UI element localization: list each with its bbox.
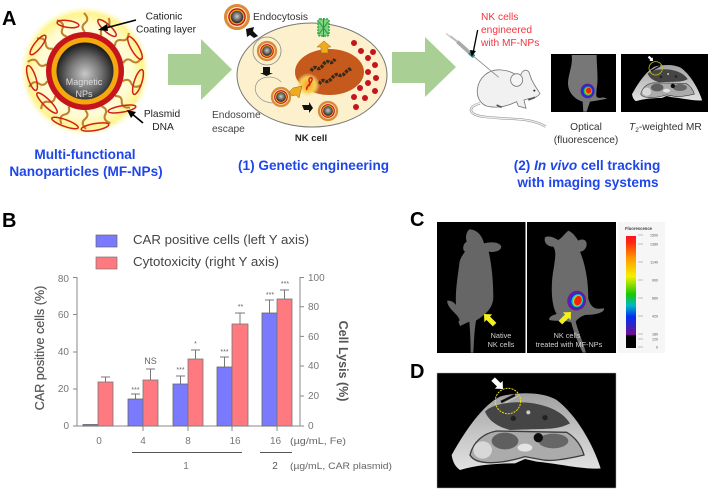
mouse ear <box>511 74 523 86</box>
heading: in vivo cell tracking: with imaging systems <box>516 175 659 190</box>
right axis tick labels: 60 <box>308 332 320 343</box>
treated mouse <box>545 231 604 353</box>
syringe <box>446 33 499 77</box>
label: T2-weighted MR: T <box>629 122 636 133</box>
yellow arrow: treated mouse <box>557 308 575 326</box>
gene delivery glow <box>296 73 320 97</box>
label: engineered NK cells: NK cells <box>481 12 518 23</box>
x axis labels: 16 <box>270 436 281 447</box>
significance marks: *** <box>220 349 229 356</box>
fluorescence colour scale: 420 <box>652 314 658 318</box>
plasmid DNA loops <box>24 17 146 133</box>
right axis tick labels: 0 <box>308 421 314 432</box>
orange pathway arrows <box>289 41 331 98</box>
x axis labels: 1 <box>183 461 189 472</box>
left axis tick labels: 20 <box>58 384 69 395</box>
yellow arrow: native mouse <box>480 310 498 328</box>
panel B: bar chart: (µg/mL, CAR plasmid) <box>290 461 392 472</box>
legend <box>96 233 309 269</box>
left axis tick labels: 40 <box>58 347 69 358</box>
label: optical: Optical <box>570 122 602 133</box>
error bars <box>101 290 289 399</box>
left axis title: CAR positive cells (%) <box>33 286 47 410</box>
right axis tick labels: 40 <box>308 361 320 372</box>
entering nanoparticle <box>224 4 250 30</box>
plasmid in nucleus <box>307 78 312 90</box>
DNA strands <box>311 59 350 84</box>
panel: D heading label: D <box>410 361 424 383</box>
fluorescence colour scale: 1500 <box>650 234 658 238</box>
ruptured endosome <box>255 77 281 103</box>
right axis tick labels: 80 <box>308 302 320 313</box>
thumbnail fluorescence signal <box>581 84 595 98</box>
significance marks: * <box>194 341 197 348</box>
cell body <box>237 23 387 127</box>
left axis tick labels: 0 <box>63 421 69 432</box>
thumbnail mouse <box>568 55 607 112</box>
panel: A heading label: A <box>2 8 16 30</box>
heading: multi-functional nanoparticles: Multi-functional <box>34 147 136 162</box>
cationic coating strands <box>27 13 142 129</box>
callout: cationic coating layer: Coating layer <box>136 24 197 36</box>
native label: Native <box>491 331 511 340</box>
fluorescence colour scale: 1380 <box>650 242 658 246</box>
significance marks: *** <box>266 292 274 299</box>
x axis unit labels: (µg/mL, Fe) <box>290 436 346 447</box>
panel C: fluorescence images <box>437 222 665 353</box>
treated mouse image <box>527 222 616 353</box>
x axis labels: 2 <box>272 461 278 472</box>
native label: NK cells <box>488 340 515 349</box>
significance marks: ** <box>238 304 243 311</box>
image: T2 MR thumbnail <box>621 54 708 112</box>
nanoparticle after endosome escape <box>271 87 291 107</box>
heading: in vivo cell tracking: (2) In vivo cell tracking <box>514 158 660 173</box>
heading: genetic engineering: (1) Genetic engineering <box>238 158 389 173</box>
mouse face <box>533 90 535 92</box>
label: engineered NK cells: engineered <box>481 25 532 36</box>
blue bars <box>83 313 277 426</box>
fluorescence colour scale: 1140 <box>650 260 658 264</box>
arrow: to genetic engineering <box>168 39 232 100</box>
dose group lines <box>132 452 292 454</box>
treated label: treated with MF-NPs <box>536 340 603 349</box>
arrow: to in vivo tracking <box>392 37 456 97</box>
right axis tick labels <box>308 273 325 432</box>
fluorescence colour scale: Fluorescence <box>625 226 653 231</box>
panel A: multifunctional nanoparticle <box>19 5 151 137</box>
thumbnail white arrow <box>647 55 655 63</box>
fluorescence colour scale: 660 <box>652 296 658 300</box>
callout: plasmid DNA: DNA <box>152 122 174 133</box>
x axis labels <box>96 436 281 472</box>
label: Endosome escape: escape <box>212 124 245 135</box>
mouse body <box>477 70 540 108</box>
significance marks <box>131 281 289 394</box>
label: engineered NK cells: with MF-NPs <box>480 38 539 49</box>
heading: multi-functional nanoparticles: Nanoparticles (MF-NPs) <box>9 164 163 179</box>
panel: C heading label: C <box>410 209 424 231</box>
white arrow <box>489 375 507 393</box>
dark cell signal <box>501 395 515 402</box>
dashed region of interest <box>495 388 521 414</box>
label: optical: (fluorescence) <box>554 135 618 146</box>
magnetic nanoparticle core <box>46 32 124 110</box>
mouse tail <box>471 103 546 127</box>
x axis labels: 4 <box>140 436 146 447</box>
callout: plasmid DNA <box>127 109 180 133</box>
chart axes <box>73 278 304 431</box>
core label: Magnetic <box>66 77 103 87</box>
x axis labels: 0 <box>96 436 102 447</box>
thumbnail region of interest <box>649 62 662 75</box>
membrane channel protein <box>318 18 329 37</box>
fluorescence colour scale <box>618 222 665 353</box>
significance marks: *** <box>281 281 289 288</box>
legend: CAR positive cells (left Y axis) <box>133 233 309 247</box>
secreted protein dots <box>351 40 379 110</box>
fluorescence signal <box>564 288 589 313</box>
native mouse image <box>437 222 526 353</box>
legend: Cytotoxicity (right Y axis) <box>133 255 279 269</box>
heading: multi-functional nanoparticles <box>9 147 163 179</box>
native mouse <box>447 229 501 353</box>
fluorescence colour scale: 900 <box>652 278 658 282</box>
right axis title: Cell Lysis (%) <box>336 321 350 401</box>
right axis tick labels: 20 <box>308 391 320 402</box>
panel D: MR image <box>437 373 616 488</box>
x axis labels: 16 <box>229 436 241 447</box>
treated label: NK cells <box>554 331 581 340</box>
injection pointer <box>473 30 478 53</box>
x axis labels: 8 <box>185 436 191 447</box>
significance marks: *** <box>131 387 140 394</box>
panel A: NK cell diagram <box>212 4 387 144</box>
red bars <box>98 299 292 426</box>
fluorescence colour scale: 120 <box>652 338 658 342</box>
nanoparticle moving in cytoplasm <box>318 101 338 121</box>
callout: cationic coating layer: Cationic <box>146 12 182 22</box>
fluorescence colour scale: 180 <box>652 332 658 336</box>
panel: B heading label: B <box>2 210 16 232</box>
callout: plasmid DNA: Plasmid <box>144 109 180 120</box>
left axis tick labels: 60 <box>58 310 69 321</box>
left axis tick labels <box>58 274 69 432</box>
nucleus <box>295 49 364 95</box>
black pathway arrows <box>246 27 313 113</box>
significance marks: *** <box>176 367 185 374</box>
label: Endocytosis: Endocytosis <box>253 12 308 23</box>
core label: NPs <box>75 89 93 99</box>
endosome with nanoparticle <box>253 37 281 65</box>
heading: in vivo cell tracking <box>514 158 660 190</box>
significance marks: NS <box>144 356 157 366</box>
nanoparticle halo <box>19 5 151 137</box>
label: T2-weighted MR: 2 <box>635 127 639 134</box>
panel B: bar chart <box>33 233 392 472</box>
label: Endosome escape: Endosome <box>212 110 261 121</box>
MR cross-section <box>452 393 601 470</box>
left axis tick labels: 80 <box>58 274 69 285</box>
illustration: syringe and mouse <box>446 30 546 127</box>
callout: cationic coating layer <box>98 12 197 36</box>
label: NK cell: NK cell <box>295 133 327 144</box>
image: optical fluorescence thumbnail <box>551 54 616 112</box>
label: T2-weighted MR: -weighted MR <box>639 122 702 133</box>
fluorescence colour scale: 0 <box>656 346 658 350</box>
right axis tick labels: 100 <box>308 273 325 284</box>
